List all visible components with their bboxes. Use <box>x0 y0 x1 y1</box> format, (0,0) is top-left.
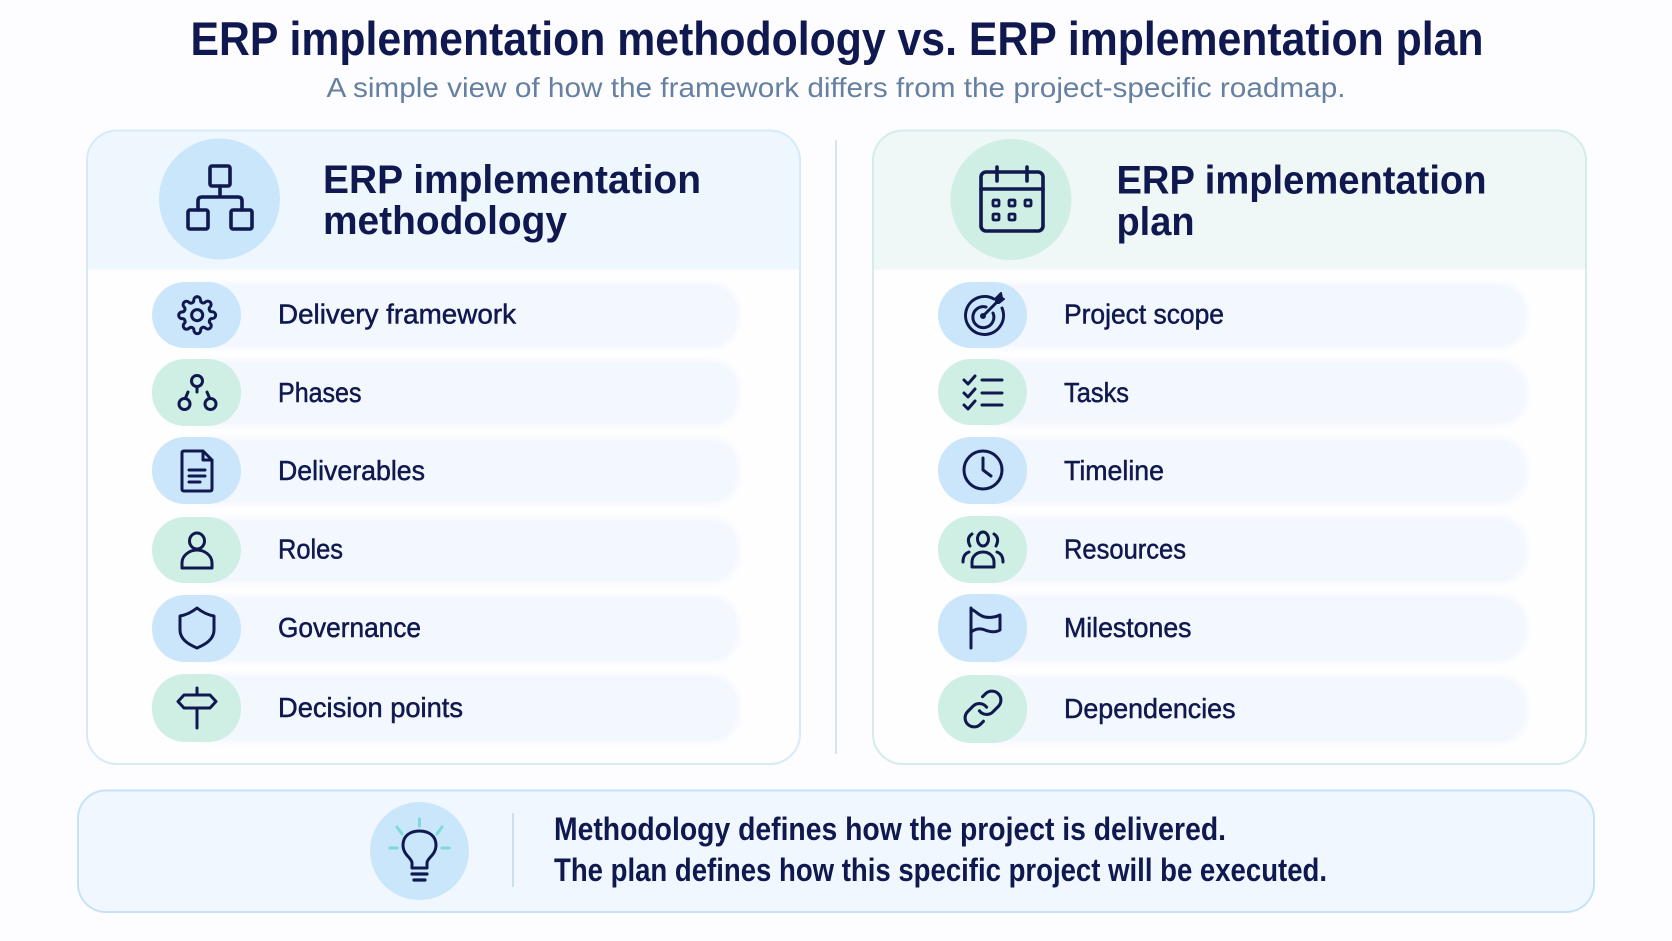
panel heading: plan <box>1116 200 1194 244</box>
row: Decision points <box>152 674 739 742</box>
row: Roles <box>152 517 739 583</box>
panel: ERP implementation methodology <box>87 130 800 764</box>
row: Phases: Phases <box>278 377 362 408</box>
row: Resources: Resources <box>1064 534 1186 564</box>
callout divider <box>512 813 514 887</box>
row: Phases <box>152 359 739 426</box>
title: ERP implementation methodology vs. ERP implementation plan <box>190 12 1484 65</box>
panel heading: ERP implementation <box>323 158 701 202</box>
row: Resources <box>938 516 1527 583</box>
row: Milestones <box>938 594 1527 662</box>
row: Project scope <box>938 282 1527 348</box>
row: Milestones: Milestones <box>1064 612 1192 643</box>
callout text: Methodology defines how the project is delivered. <box>554 811 1226 847</box>
row: Timeline <box>938 437 1527 504</box>
row: Delivery framework: Delivery framework <box>278 298 516 330</box>
row: Delivery framework <box>152 282 739 348</box>
panel heading: methodology <box>323 199 568 243</box>
callout: key takeaway <box>78 790 1594 912</box>
row: Timeline: Timeline <box>1064 455 1164 486</box>
row: Project scope: Project scope <box>1064 298 1224 330</box>
row: Tasks: Tasks <box>1064 377 1129 408</box>
row: Dependencies <box>938 675 1527 743</box>
row: Governance <box>152 595 739 662</box>
callout text <box>554 811 1327 888</box>
row: Deliverables <box>152 437 739 504</box>
row: Governance: Governance <box>278 612 421 643</box>
header icon: calendar <box>950 139 1072 260</box>
panel heading <box>323 158 701 243</box>
callout text: The plan defines how this specific project will be executed. <box>554 852 1327 888</box>
row: Deliverables: Deliverables <box>278 455 425 486</box>
subtitle: A simple view of how the framework differs from the project-specific roadmap. <box>326 72 1346 103</box>
panel: ERP implementation plan <box>873 130 1586 764</box>
header icon: hierarchy <box>159 138 280 260</box>
center divider <box>835 140 837 754</box>
panel heading: ERP implementation <box>1116 158 1486 202</box>
icon: lightbulb <box>370 802 469 900</box>
row: Roles: Roles <box>278 534 343 564</box>
row: Dependencies: Dependencies <box>1064 693 1236 724</box>
panel heading <box>1116 158 1486 244</box>
row: Decision points: Decision points <box>278 692 463 723</box>
row: Tasks <box>938 359 1527 425</box>
